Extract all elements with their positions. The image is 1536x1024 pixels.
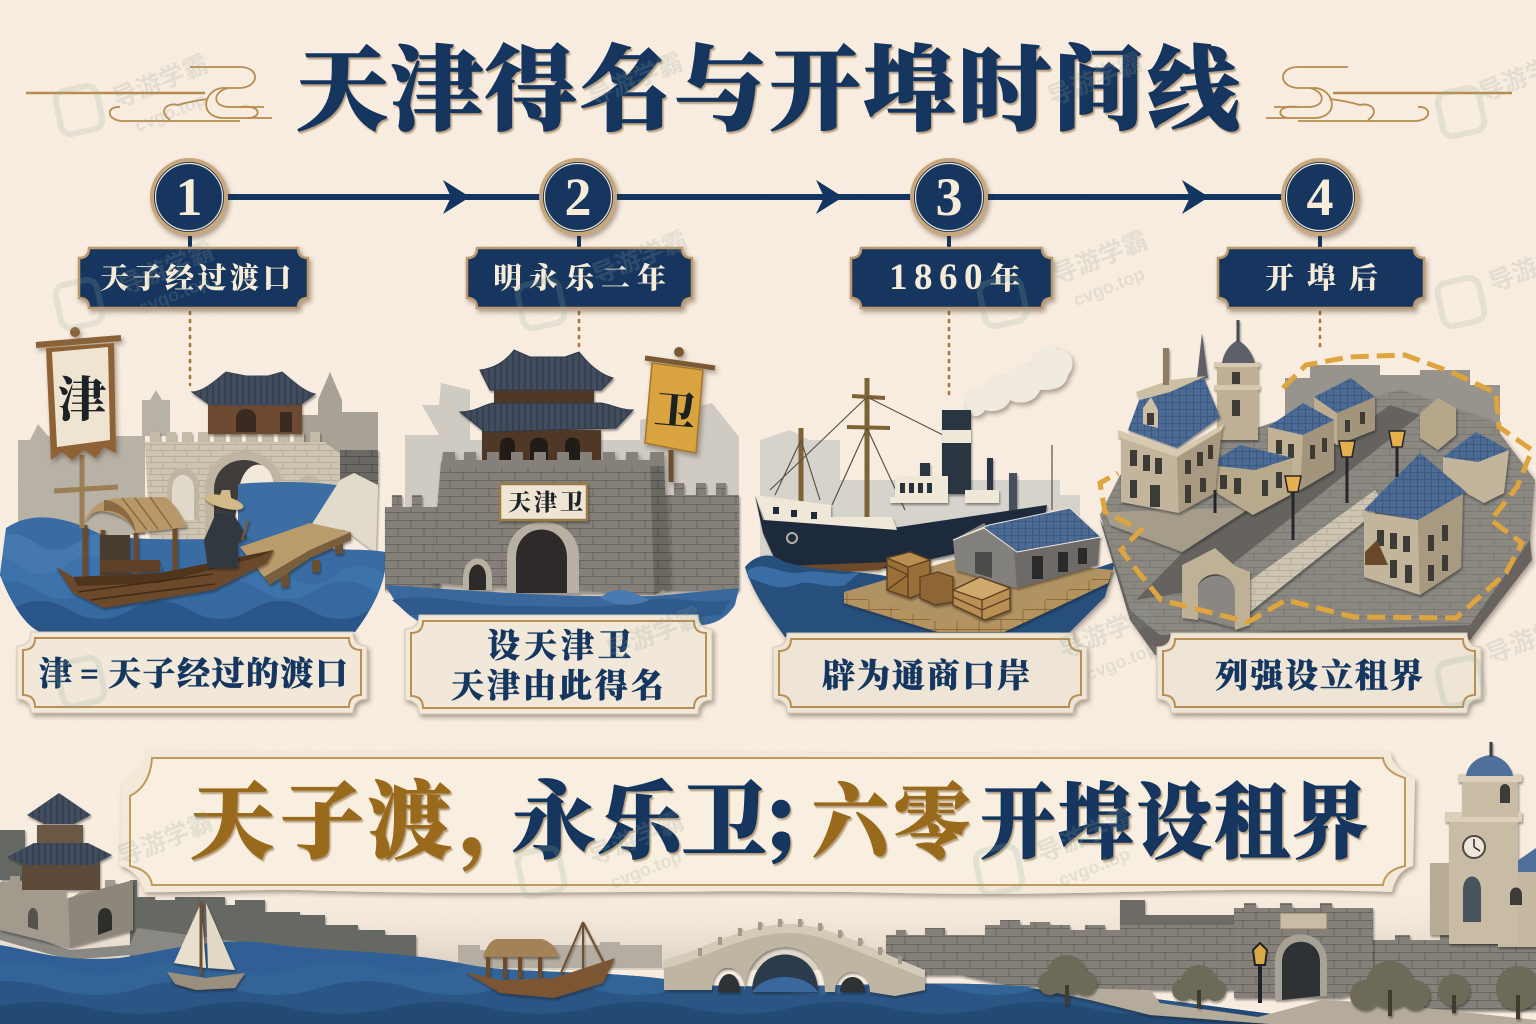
decorative cloud ornament left xyxy=(26,67,272,121)
yellow flag 卫 xyxy=(645,347,715,482)
tag: 明永乐二年 xyxy=(467,248,692,308)
caption 3: 辟为通商口岸 xyxy=(822,658,1030,695)
water at fortress base xyxy=(386,585,739,625)
front pyramid roof building xyxy=(1364,453,1466,595)
faint watermarks: 导游学霸 xyxy=(115,237,218,301)
slogan text xyxy=(190,775,1368,872)
sign plaque 天津卫 xyxy=(500,484,587,520)
faint watermarks: cvgo.top xyxy=(607,846,684,893)
harbour water xyxy=(745,556,1115,637)
steam cloud xyxy=(966,347,1072,416)
clock tower xyxy=(1197,320,1260,440)
faint watermarks: 导游学霸 xyxy=(1055,601,1159,664)
scene 1: ferry at the Tianzi crossing xyxy=(0,327,385,632)
distant grey city walls xyxy=(18,372,378,535)
ferry boat xyxy=(56,497,274,608)
cargo crates xyxy=(887,552,1010,620)
scene 2: Tianjin Wei fortress xyxy=(385,347,739,625)
pale far wall xyxy=(458,942,662,968)
covered boat xyxy=(465,922,615,998)
clock tower building xyxy=(1430,742,1536,947)
main fortress gate tower xyxy=(431,452,669,595)
blue paper water xyxy=(0,517,385,632)
tag: 开埠后 xyxy=(1218,248,1424,308)
side walls xyxy=(385,483,739,590)
stone arch gate xyxy=(1182,548,1250,630)
faint watermarks: cvgo.top xyxy=(136,271,213,318)
faint watermarks: 导游学霸 xyxy=(1048,226,1152,290)
yellow flag 卫: 卫 xyxy=(653,387,697,436)
sail spar xyxy=(54,455,118,528)
large mansard building xyxy=(1118,348,1224,513)
faint watermarks: 导游学霸 xyxy=(1033,805,1136,868)
caption 2 xyxy=(405,615,712,714)
step 3 number circle xyxy=(912,160,986,234)
rear buildings xyxy=(1208,378,1509,515)
decorative cloud ornament right xyxy=(1266,67,1512,121)
caption 4 xyxy=(1157,633,1481,713)
slogan text: 开埠设租界 xyxy=(980,779,1368,870)
warehouse xyxy=(953,508,1101,588)
diagonal avenue xyxy=(1136,405,1420,600)
bottom panorama xyxy=(0,742,1536,1024)
street lamp xyxy=(1253,943,1267,1003)
step 4 number circle xyxy=(1283,160,1357,234)
caption 4: 列强设立租界 xyxy=(1215,658,1423,695)
tag: 天子经过渡口 xyxy=(79,248,308,308)
tag: 1860年 xyxy=(851,248,1052,308)
far left dark wall silhouettes xyxy=(0,830,416,960)
step 2 number circle: 2 xyxy=(564,167,592,227)
hazy backdrop xyxy=(760,430,1080,560)
gold dashed concession boundary xyxy=(1100,355,1532,622)
scene 4: foreign concession district xyxy=(1100,320,1535,655)
faint watermarks: 导游学霸 xyxy=(114,808,217,872)
paper trees xyxy=(1038,955,1536,1019)
sign plaque 天津卫: 天津卫 xyxy=(508,490,583,515)
faint watermarks: 导游学霸 xyxy=(584,48,687,112)
concession ground platform xyxy=(1100,390,1535,655)
title: 天津得名与开埠时间线 xyxy=(296,40,1239,142)
timeline arrow line xyxy=(225,180,1290,214)
faint watermarks: cvgo.top xyxy=(1056,844,1133,890)
caption 2: 设天津卫 xyxy=(487,628,631,665)
caption 3 xyxy=(773,633,1087,713)
faint watermarks: cvgo.top xyxy=(132,89,209,136)
slogan text: 六零 xyxy=(812,779,970,870)
two-tier pavilion xyxy=(460,350,633,464)
slogan text: 天子渡，永乐卫； xyxy=(190,775,841,872)
right fortress wall xyxy=(886,900,1536,1010)
flag with the character 津 xyxy=(36,327,121,460)
wooden pier xyxy=(240,523,351,587)
left pagoda and fort xyxy=(0,793,133,947)
pavilion above the gate xyxy=(192,372,315,434)
rear water layer xyxy=(230,482,345,560)
stone sill by the river xyxy=(0,925,402,968)
ferryman in wide hat xyxy=(203,490,248,568)
wooden dock xyxy=(844,560,1113,632)
faint watermarks: cvgo.top xyxy=(1070,264,1147,310)
tag: 1860年: 1860年 xyxy=(889,257,1020,298)
street lamps xyxy=(1215,431,1405,540)
step 2 number circle xyxy=(541,160,615,234)
step 3 number circle: 3 xyxy=(936,167,962,227)
big building terrace xyxy=(1105,507,1252,552)
flag with the character 津: 津 xyxy=(58,374,106,427)
summary banner xyxy=(120,750,1415,894)
faint watermarks: 导游学霸 xyxy=(588,226,692,290)
stone arch bridge xyxy=(664,919,925,996)
river water xyxy=(0,942,1271,1024)
riverside paved bank xyxy=(1028,987,1536,1024)
faint watermarks: 导游学霸 xyxy=(585,807,688,871)
pale backdrop city xyxy=(405,383,739,595)
faint watermarks: cvgo.top xyxy=(1083,638,1160,685)
scene 3: treaty port steamship xyxy=(745,347,1115,637)
tag: 天子经过渡口: 天子经过渡口 xyxy=(100,262,292,295)
sailboat xyxy=(167,901,245,990)
step 1 number circle: 1 xyxy=(176,167,202,227)
step 4 number circle: 4 xyxy=(1306,167,1334,227)
rigging and masts xyxy=(770,378,1052,525)
caption 1: 津=天子经过的渡口 xyxy=(39,656,348,693)
caption 1 xyxy=(17,632,367,713)
faint watermarks: 导游学霸 xyxy=(109,50,212,114)
stone embankment wall xyxy=(1237,490,1385,620)
distant skyline xyxy=(1285,365,1500,450)
ship hull xyxy=(755,495,1047,575)
step 1 number circle xyxy=(152,160,226,234)
faint watermarks: 导游学霸 xyxy=(603,602,706,666)
faint watermarks: 导游学霸 xyxy=(1044,48,1147,112)
gate tower with arch xyxy=(1234,903,1373,1000)
broken stone pier head xyxy=(310,473,378,553)
tag: 明永乐二年: 明永乐二年 xyxy=(493,261,666,295)
ship superstructure and funnel xyxy=(890,410,1017,519)
arched stone bridge gate xyxy=(145,432,378,540)
caption 2: 天津由此得名 xyxy=(451,668,664,705)
tag: 开埠后: 开埠后 xyxy=(1265,262,1378,295)
connectors between circles, tags and scenes xyxy=(190,236,1320,398)
